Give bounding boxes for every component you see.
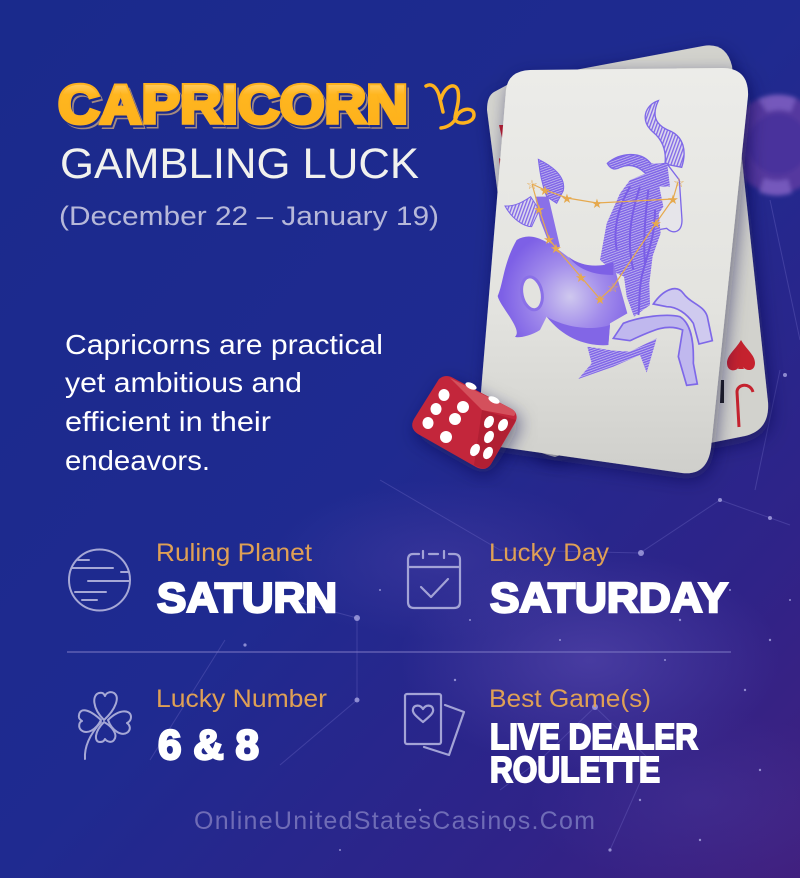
- divider line: [67, 652, 731, 653]
- description text: yet ambitious and: [65, 367, 302, 398]
- heart pip: [727, 340, 755, 370]
- description text: endeavors.: [65, 445, 210, 476]
- title: Capricorn: CAPRICORN: [60, 76, 410, 138]
- constellation: ★: [539, 183, 551, 198]
- stat: lucky day: Lucky Day: [489, 539, 610, 567]
- title: Capricorn: CAPRICORN: [61, 77, 411, 139]
- back card left: [487, 85, 600, 457]
- serpent body: [498, 237, 627, 345]
- stat: lucky number: [79, 685, 327, 768]
- stat: best games: [405, 685, 698, 790]
- constellation: ★: [667, 192, 679, 207]
- back card right: [575, 45, 768, 445]
- date range: (December 22 – January 19): [59, 201, 439, 231]
- watermark: OnlineUnitedStatesCasinos.Com: [194, 807, 595, 835]
- constellation: ★: [591, 196, 603, 211]
- description text: Capricorns are practical: [65, 329, 383, 360]
- icon: playing cards: [405, 694, 464, 755]
- front legs: [653, 289, 712, 344]
- constellation: ★: [575, 270, 587, 285]
- lower fin: [578, 338, 657, 379]
- constellation: ★: [543, 232, 555, 247]
- capricorn sea-goat illustration: [498, 101, 712, 385]
- stat: ruling planet: SATURN: [157, 574, 337, 621]
- playing cards: [478, 45, 768, 473]
- stat: best games: Best Game(s): [489, 685, 651, 713]
- icon: four-leaf clover: [79, 692, 131, 759]
- constellation: ★: [550, 241, 562, 256]
- decorative poker chip: [728, 95, 800, 195]
- icon: calendar: [408, 551, 460, 608]
- stat: lucky number: Lucky Number: [156, 685, 327, 713]
- stat: lucky day: SATURDAY: [490, 574, 728, 621]
- tail fin: [538, 159, 564, 203]
- red dice: [412, 376, 517, 469]
- stat: lucky number: 6 & 8: [158, 721, 259, 768]
- stat: ruling planet: [69, 539, 337, 621]
- constellation: ★: [533, 202, 545, 217]
- goat ear: [607, 155, 653, 181]
- subtitle: GAMBLING LUCK: [60, 140, 419, 188]
- stat: lucky day: [408, 539, 728, 621]
- constellation: ★: [650, 216, 662, 231]
- goat mane: [600, 172, 661, 317]
- front card: [478, 68, 748, 473]
- title: Capricorn: CAPRICORN: [58, 73, 408, 135]
- stat: best games: LIVE DEALER: [490, 716, 698, 757]
- goat head and face: [650, 163, 682, 232]
- constellation: ★: [561, 191, 573, 206]
- constellation: ★: [594, 292, 606, 307]
- constellation: ☆: [673, 175, 685, 190]
- icon: planet: [69, 550, 130, 610]
- description text: efficient in their: [65, 406, 271, 437]
- title: Capricorn: CAPRICORN: [58, 73, 408, 135]
- icon: capricorn zodiac glyph: [426, 85, 474, 128]
- goat horn: [645, 101, 684, 167]
- stat: ruling planet: Ruling Planet: [156, 539, 312, 567]
- constellation: [526, 175, 685, 307]
- constellation: ☆: [526, 177, 538, 192]
- stat: best games: ROULETTE: [490, 749, 660, 790]
- constellation: ☆: [607, 280, 619, 295]
- description text: [65, 329, 383, 476]
